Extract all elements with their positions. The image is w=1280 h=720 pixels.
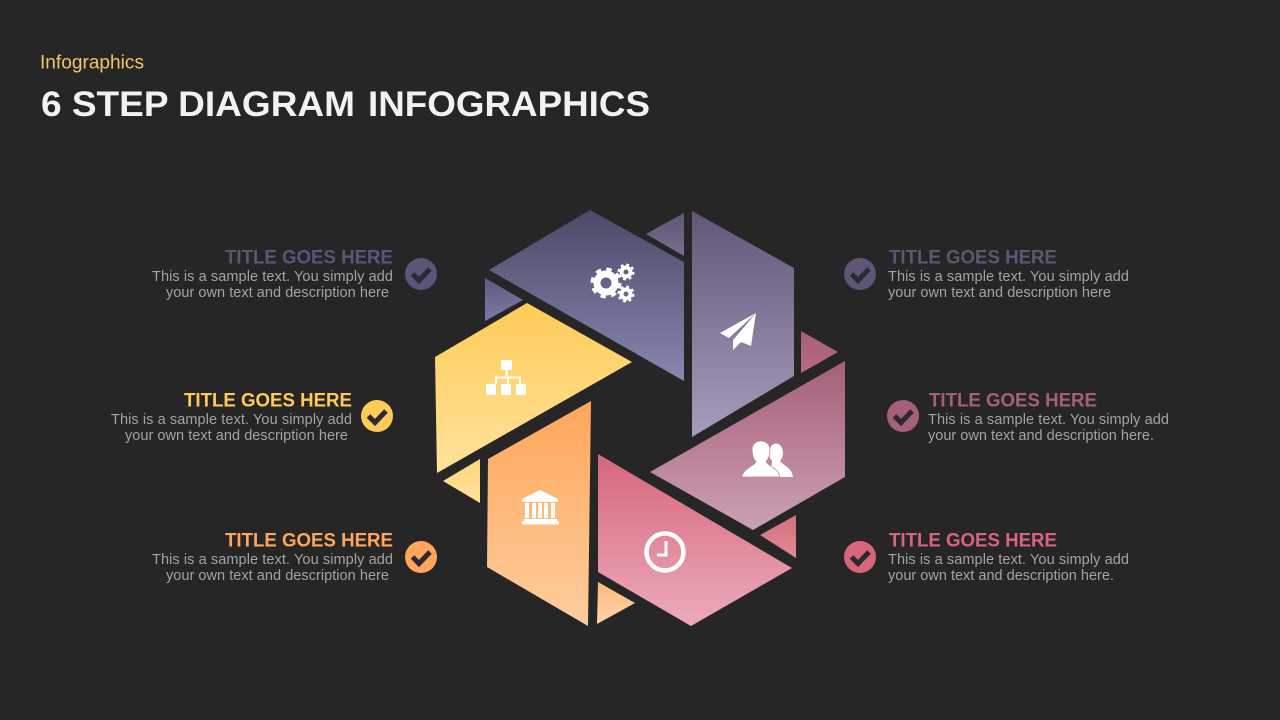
callout: step 1 blue-grey: [152, 246, 437, 301]
callout: step 4 mauve: [887, 390, 1169, 444]
small triangle: blue-grey: [485, 278, 523, 321]
segment: blue-grey: [489, 210, 684, 381]
small triangle: purple: [646, 213, 684, 256]
segment: yellow: [435, 303, 632, 473]
callout: step 5 orange: TITLE GOES HERE: [225, 530, 393, 552]
callout: step 6 pink: This is a sample text. You simply add: [888, 552, 1129, 568]
segment: purple: [692, 211, 794, 437]
icon: org chart: [486, 360, 526, 395]
title: [41, 85, 650, 124]
title: 6 STEP DIAGRAM: [41, 85, 355, 124]
hexagon diagram: [435, 210, 845, 626]
callout: step 1 blue-grey: This is a sample text. You simply add: [152, 269, 393, 285]
callout: step 2 purple: [844, 246, 1129, 301]
callout: step 2 purple: This is a sample text. You simply add: [888, 269, 1129, 285]
segment: orange: [487, 401, 591, 626]
callout: step 6 pink: TITLE GOES HERE: [889, 530, 1057, 552]
small triangle: orange: [597, 582, 635, 624]
callout: step 1 blue-grey: your own text and description here: [166, 285, 389, 301]
small triangle: mauve: [801, 331, 838, 373]
icon: bank: [522, 490, 559, 524]
segment: mauve: [650, 361, 845, 530]
callout: step 3 yellow: This is a sample text. You simply add: [111, 412, 352, 428]
small triangle: pink: [760, 515, 796, 558]
callout: step 2 purple: TITLE GOES HERE: [889, 246, 1057, 268]
callout: step 6 pink: your own text and description here.: [888, 568, 1114, 584]
callout: step 5 orange: your own text and description here: [166, 568, 389, 584]
title: INFOGRAPHICS: [368, 85, 650, 124]
callout: step 4 mauve: This is a sample text. You simply add: [928, 412, 1169, 428]
icon: clock: [646, 534, 684, 570]
callout: step 6 pink: [844, 530, 1129, 584]
callout: step 4 mauve: your own text and description here.: [928, 428, 1154, 444]
callout: step 2 purple: your own text and description here: [888, 285, 1111, 301]
small triangle: yellow: [443, 459, 480, 503]
callout: step 3 yellow: [111, 390, 393, 444]
callout: step 3 yellow: TITLE GOES HERE: [184, 390, 352, 412]
callout: step 4 mauve: TITLE GOES HERE: [929, 390, 1097, 412]
callout: step 1 blue-grey: TITLE GOES HERE: [225, 246, 393, 268]
icon: users: [742, 441, 793, 477]
callout: step 3 yellow: your own text and description here: [125, 428, 348, 444]
icon: gears: [593, 265, 633, 301]
callout: step 5 orange: This is a sample text. You simply add: [152, 552, 393, 568]
icon: paper plane: [720, 313, 756, 350]
callout: step 5 orange: [152, 530, 437, 584]
small heading: Infographics: Infographics: [40, 52, 144, 74]
segment: pink: [598, 454, 792, 626]
